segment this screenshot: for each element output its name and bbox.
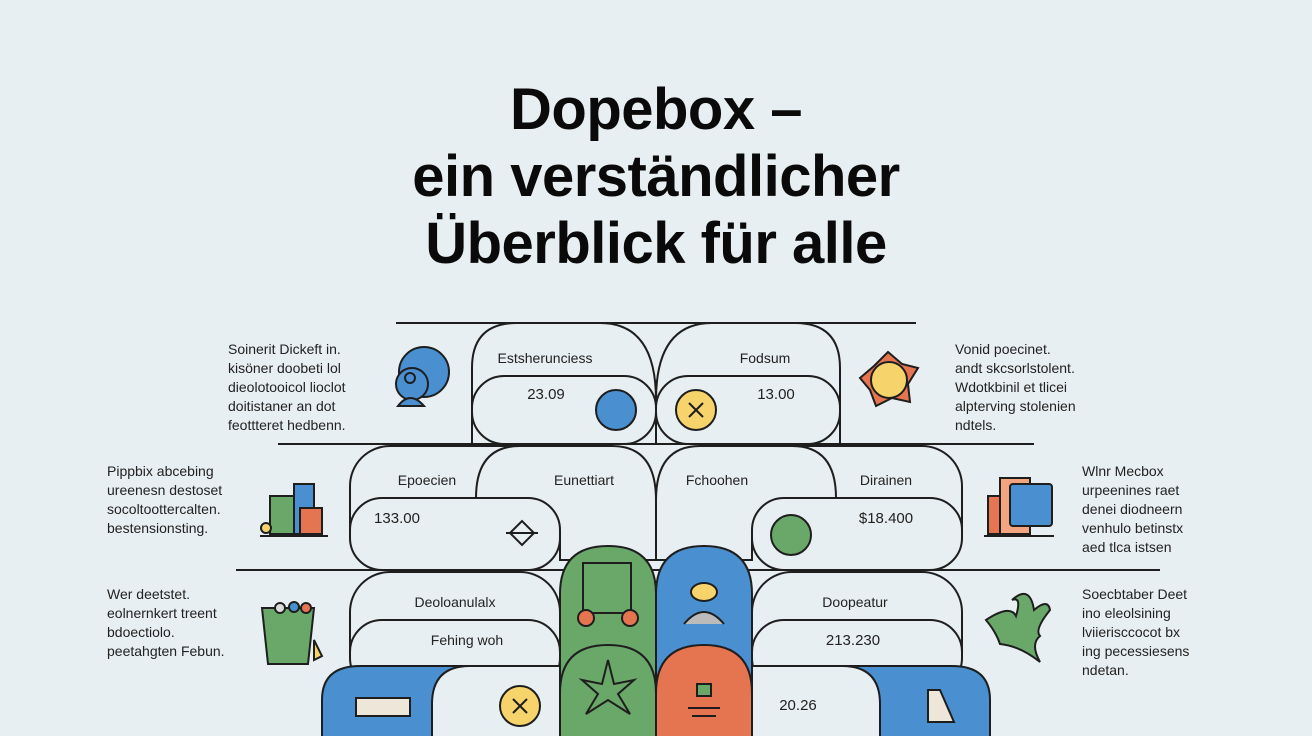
text block: right 3	[1082, 586, 1189, 678]
icon: boxes green	[260, 484, 328, 536]
text block: right 1: Wdotkbinil et tlicei	[955, 379, 1067, 395]
panel: row2 right: Dirainen	[860, 472, 912, 488]
text block: left 3	[107, 586, 225, 659]
text block: right 3: lviierisccocot bx	[1082, 624, 1180, 640]
text block: left 1: feottteret hedbenn.	[228, 417, 346, 433]
text block: left 2	[107, 463, 222, 536]
title	[412, 77, 900, 276]
panel: top-left: Estsherunciess	[498, 350, 592, 366]
text block: right 1	[955, 341, 1076, 433]
text block: left 3: eolnernkert treent	[107, 605, 217, 621]
panel: row3 left: Fehing woh	[431, 632, 503, 648]
text block: left 3: Wer deetstet.	[107, 586, 190, 602]
panel: row2 left: Eunettiart	[554, 472, 614, 488]
panel: top-right	[656, 323, 840, 444]
title: ein verständlicher	[412, 144, 900, 209]
panel: bottom left blue	[322, 666, 560, 736]
text block: right 2: denei diodneern	[1082, 501, 1182, 517]
text block: left 1	[228, 341, 346, 433]
text block: left 1: kisöner doobeti lol	[228, 360, 341, 376]
panel: row3 right: 213.230	[826, 632, 880, 649]
text block: left 2: Pippbix abcebing	[107, 463, 214, 479]
panel: row2 right: Fchoohen	[686, 472, 748, 488]
text block: left 2: ureenesn destoset	[107, 482, 222, 498]
text block: right 1: Vonid poecinet.	[955, 341, 1051, 357]
text block: left 3: peetahgten Febun.	[107, 643, 225, 659]
panel: row2 right	[656, 446, 962, 570]
text block: left 2: socoltoottercalten.	[107, 501, 221, 517]
icon: leaf	[986, 594, 1050, 662]
icon: monitor books	[984, 478, 1054, 536]
text block: right 2: Wlnr Mecbox	[1082, 463, 1164, 479]
panel: row3 right: Doopeatur	[822, 594, 888, 610]
panel: row3 left: Deoloanulalx	[415, 594, 495, 610]
title: Dopebox –	[510, 77, 802, 142]
text block: left 1: dieolotooicol lioclot	[228, 379, 346, 395]
panel: top-right: Fodsum	[740, 350, 790, 366]
panel: bottom right blue	[752, 666, 990, 736]
panel: row3 right	[752, 572, 962, 692]
icon: green bucket	[262, 602, 322, 664]
panel: row2 left: Epoecien	[398, 472, 456, 488]
panel: row3 left	[350, 572, 560, 692]
panel: row2 right: $18.400	[859, 510, 913, 527]
text block: right 2: venhulo betinstx	[1082, 520, 1183, 536]
text block: right 3: ing pecessiesens	[1082, 643, 1189, 659]
text block: right 3: ndetan.	[1082, 662, 1129, 678]
text block: right 1: andt skcsorlstolent.	[955, 360, 1075, 376]
panel: top-right: 13.00	[757, 386, 795, 403]
pill: blue center	[656, 546, 752, 736]
panel: row2 left	[350, 446, 656, 570]
icon: sun flower	[860, 352, 918, 406]
panel: bottom right blue: 20.26	[779, 697, 817, 714]
text block: right 1: ndtels.	[955, 417, 996, 433]
pill: green center	[560, 546, 656, 736]
panel: top-left	[472, 323, 656, 444]
panel: top-left: 23.09	[527, 386, 565, 403]
text block: right 3: Soecbtaber Deet	[1082, 586, 1187, 602]
text block: left 1: Soinerit Dickeft in.	[228, 341, 341, 357]
text block: left 1: doitistaner an dot	[228, 398, 335, 414]
text block: left 2: bestensionsting.	[107, 520, 208, 536]
panel: row2 left: 133.00	[374, 510, 420, 527]
title: Überblick für alle	[425, 211, 887, 276]
text block: left 3: bdoectiolo.	[107, 624, 175, 640]
text block: right 1: alpterving stolenien	[955, 398, 1076, 414]
text block: right 2: urpeenines raet	[1082, 482, 1179, 498]
text block: right 2	[1082, 463, 1183, 555]
text block: right 3: ino eleolsining	[1082, 605, 1171, 621]
text block: right 2: aed tlca istsen	[1082, 539, 1172, 555]
icon: blue figure	[396, 347, 449, 406]
